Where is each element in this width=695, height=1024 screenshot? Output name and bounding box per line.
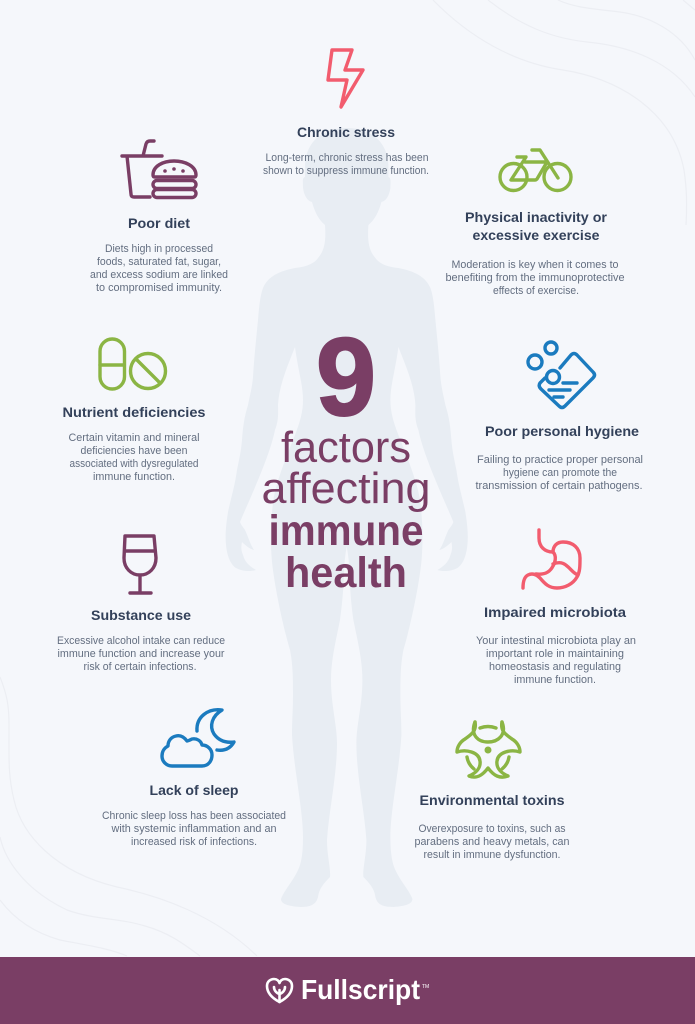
text: microbiota description: Your intestinal microbiota play an [476, 635, 636, 647]
trademark: TM [422, 984, 429, 990]
title: 9 factors affecting immune health: affecting [262, 464, 430, 513]
icon: cloud and moon [162, 710, 234, 766]
text: toxins description [414, 823, 570, 861]
text: chronic stress description: shown to suppress immune function. [263, 165, 429, 177]
heading: impaired microbiota: Impaired microbiota [484, 604, 626, 620]
text: nutrient description: deficiencies have been [80, 445, 188, 457]
title: 9 factors affecting immune health: factors [281, 423, 411, 472]
icon: soap and bubbles [528, 342, 594, 408]
icon: wine glass [124, 536, 156, 593]
text: hygiene description: transmission of certain pathogens. [476, 480, 642, 492]
text: poor diet description [90, 243, 228, 294]
title: 9 factors affecting immune health: 9 [316, 316, 376, 439]
text: nutrient description [68, 432, 200, 483]
heading: lack of sleep: Lack of sleep [150, 782, 238, 798]
body silhouette [226, 128, 468, 907]
text: nutrient description: associated with dysregulated [70, 458, 198, 470]
heading: chronic stress: Chronic stress [297, 124, 395, 140]
text: poor diet description: and excess sodium are linked [90, 269, 228, 281]
text: exercise description: benefiting from the immunoprotective [446, 272, 624, 284]
text: hygiene description: hygiene can promote the [503, 467, 617, 479]
text: substance description: risk of certain infections. [84, 661, 196, 673]
heading: nutrient deficiencies: Nutrient deficiencies [62, 404, 206, 420]
text: sleep description: increased risk of infections. [131, 836, 257, 848]
text: microbiota description: immune function. [514, 674, 596, 686]
icon: bicycle [500, 150, 571, 190]
text: microbiota description: important role in maintaining [486, 648, 624, 660]
footer band [0, 957, 695, 1024]
title: 9 factors affecting immune health: immune [268, 507, 424, 555]
text: sleep description: with systemic inflammation and an [111, 823, 276, 835]
icon: fullscript heart logo [267, 979, 292, 1002]
heading: physical inactivity or excessive exercise: excessive exercise [472, 227, 600, 243]
icon: biohazard [457, 722, 520, 777]
text: chronic stress description: Long-term, chronic stress has been [266, 152, 428, 164]
text: toxins description: parabens and heavy metals, can [414, 836, 570, 848]
text: poor diet description: to compromised immunity. [96, 282, 222, 294]
text: hygiene description [476, 454, 643, 492]
icon: drink and burger [122, 141, 196, 198]
heading: substance use: Substance use [91, 607, 191, 623]
text: poor diet description: Diets high in processed [105, 243, 213, 255]
heading: physical inactivity or excessive exercise [465, 209, 608, 243]
text: toxins description: result in immune dysfunction. [424, 849, 560, 861]
text: sleep description: Chronic sleep loss has been associated [102, 810, 286, 822]
text: microbiota description: homeostasis and regulating [489, 661, 621, 673]
heading: physical inactivity or excessive exercise: Physical inactivity or [465, 209, 608, 225]
text: exercise description [446, 259, 624, 297]
text: nutrient description: immune function. [93, 471, 175, 483]
title: 9 factors affecting immune health: health [285, 549, 407, 597]
logo wordmark: Fullscript [301, 974, 420, 1005]
text: nutrient description: Certain vitamin and mineral [68, 432, 200, 444]
text: exercise description: Moderation is key when it comes to [452, 259, 618, 271]
text: hygiene description: Failing to practice proper personal [477, 454, 643, 466]
text: sleep description [102, 810, 286, 848]
icon: stomach [523, 530, 580, 588]
text: substance description: immune function and increase your [58, 648, 225, 660]
text: poor diet description: foods, saturated fat, sugar, [97, 256, 221, 268]
text: substance description [57, 635, 225, 673]
icon: pill and blocked circle [100, 339, 166, 389]
text: chronic stress description [263, 152, 429, 177]
text: substance description: Excessive alcohol intake can reduce [57, 635, 225, 647]
heading: poor personal hygiene: Poor personal hygiene [485, 423, 639, 439]
text: exercise description: effects of exercise. [493, 285, 579, 297]
icon: lightning bolt [328, 50, 363, 107]
text: microbiota description [476, 635, 636, 686]
heading: environmental toxins: Environmental toxins [420, 792, 565, 808]
text: toxins description: Overexposure to toxins, such as [418, 823, 566, 835]
title: 9 factors affecting immune health [262, 316, 430, 597]
heading: poor diet: Poor diet [128, 215, 190, 231]
